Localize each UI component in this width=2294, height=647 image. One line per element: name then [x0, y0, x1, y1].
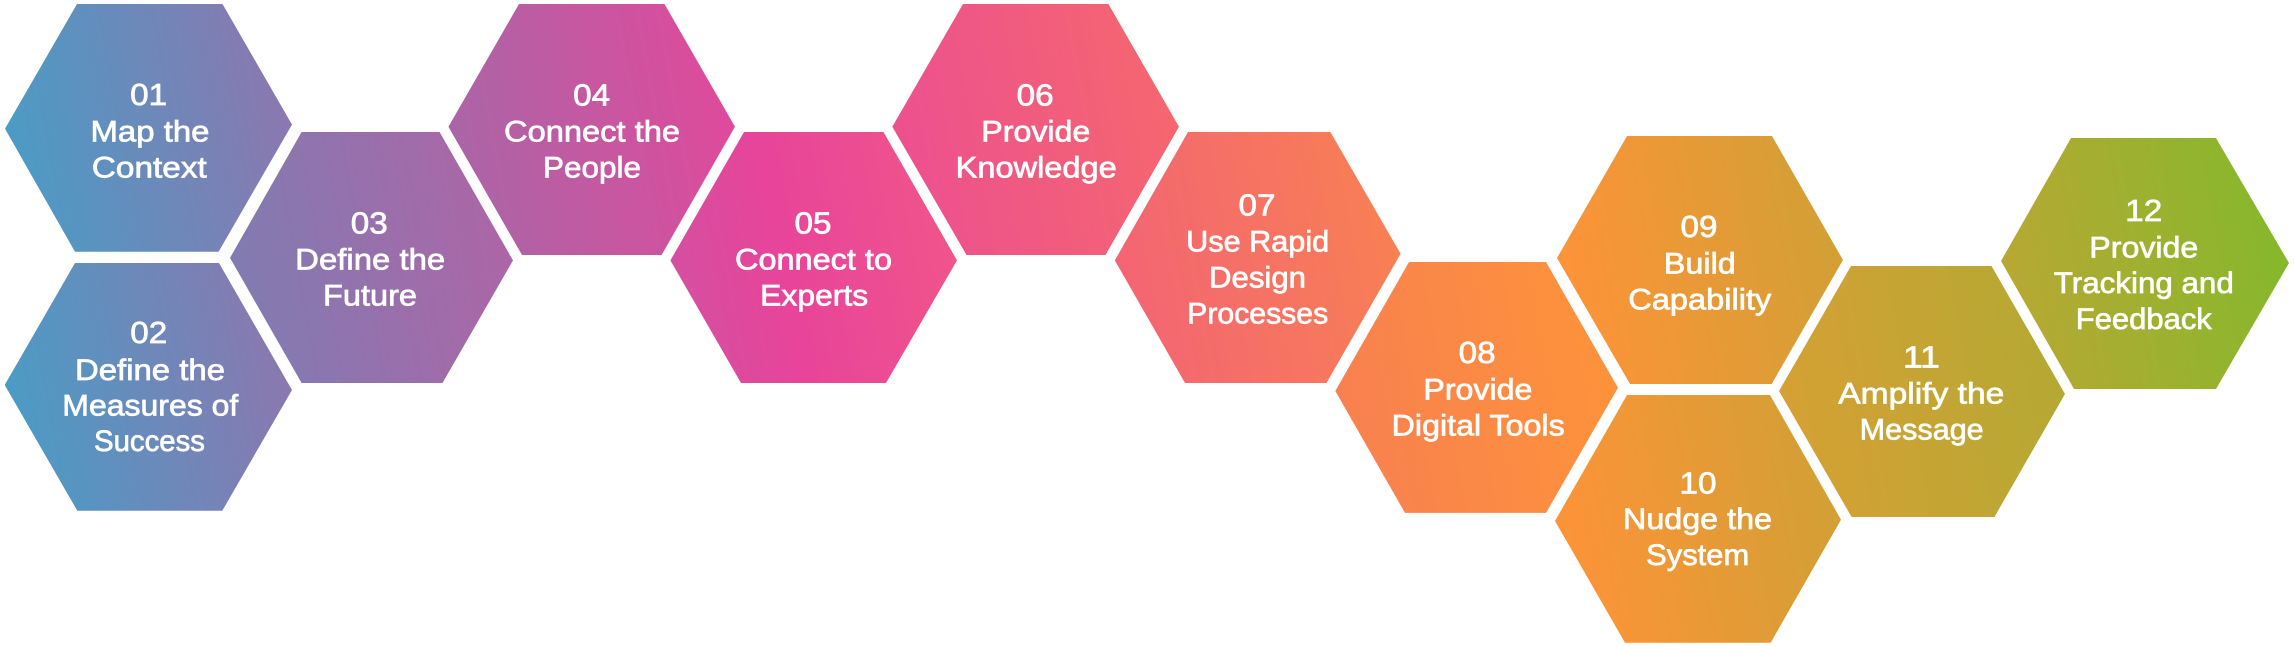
hexagon 11: Amplify the Message [1779, 266, 2065, 517]
hexagon 01: Map the Context [5, 4, 292, 252]
label 12: Provide [2089, 231, 2198, 264]
label 02: Success [94, 425, 205, 458]
label 08: Digital Tools [1392, 409, 1565, 442]
hexagon shape 03 [230, 132, 513, 383]
label 06: Provide [981, 116, 1090, 149]
label 03: 03 [351, 206, 388, 240]
label 03: Define the [295, 243, 445, 276]
hexagon 07: Use Rapid Design Processes [1115, 132, 1401, 383]
label 04 [504, 78, 680, 185]
hexagon shape 12 [2001, 138, 2289, 389]
label 02: Measures of [62, 390, 239, 422]
hexagon 04: Connect the People [448, 4, 735, 255]
hexagon 12: Provide Tracking and Feedback [2001, 138, 2289, 389]
label 08: Provide [1423, 373, 1532, 406]
label 05: Connect to [735, 243, 892, 276]
label 10: Nudge the [1623, 503, 1772, 536]
hexagon shape 08 [1335, 262, 1618, 513]
label 03: Future [323, 280, 417, 313]
label 01: Context [92, 151, 208, 184]
label 09: 09 [1680, 209, 1718, 244]
label 07 [1186, 187, 1329, 330]
hexagon shape 05 [670, 132, 957, 383]
hexagon shape 07 [1115, 132, 1401, 383]
label 05 [735, 206, 892, 313]
hexagon 08: Provide Digital Tools [1335, 262, 1618, 513]
label 11 [1838, 340, 2004, 446]
hexagon 03: Define the Future [230, 132, 513, 383]
label 06 [956, 78, 1117, 185]
label 09 [1628, 209, 1771, 316]
label 11: Amplify the [1838, 378, 2004, 410]
hexagon shape 10 [1555, 395, 1841, 643]
hexagon 10: Nudge the System [1555, 395, 1841, 643]
hexagon shape 06 [892, 4, 1179, 255]
hexagon 06: Provide Knowledge [892, 4, 1179, 255]
label 01: 01 [130, 77, 167, 112]
hexagon 02: Define the Measures of Success [5, 263, 292, 511]
label 05: Experts [760, 280, 868, 313]
label 01 [90, 77, 210, 184]
label 07: Use Rapid [1186, 226, 1329, 259]
hexagon shape 02 [5, 263, 292, 511]
label 12 [2054, 193, 2234, 336]
label 09: Build [1664, 248, 1736, 281]
label 12: Tracking and [2054, 267, 2234, 300]
label 04: 04 [573, 78, 610, 112]
hexagon shape 04 [448, 4, 735, 255]
label 03 [295, 206, 445, 313]
label 04: People [543, 152, 641, 185]
label 06: 06 [1017, 78, 1054, 112]
label 02 [62, 315, 239, 458]
label 12: 12 [2125, 193, 2162, 228]
label 10 [1623, 466, 1772, 572]
label 05: 05 [794, 206, 832, 240]
label 08: 08 [1459, 335, 1496, 370]
label 02: Define the [75, 354, 225, 387]
label 11: Message [1860, 413, 1984, 446]
label 01: Map the [90, 116, 210, 148]
label 02: 02 [130, 315, 167, 350]
hexagon 05: Connect to Experts [670, 132, 957, 383]
label 11: 11 [1903, 340, 1940, 375]
label 10: 10 [1680, 466, 1716, 501]
label 06: Knowledge [956, 152, 1117, 185]
label 08 [1392, 335, 1565, 442]
hexagon shape 11 [1779, 266, 2065, 517]
label 07: Processes [1187, 298, 1328, 330]
hexagon 09: Build Capability [1557, 136, 1843, 384]
hexagon shape 09 [1557, 136, 1843, 384]
label 07: Design [1209, 262, 1306, 295]
label 04: Connect the [504, 116, 680, 149]
label 07: 07 [1238, 187, 1276, 222]
label 12: Feedback [2076, 303, 2213, 336]
hexagon shape 01 [5, 4, 292, 252]
label 10: System [1646, 539, 1749, 572]
label 09: Capability [1628, 284, 1771, 316]
